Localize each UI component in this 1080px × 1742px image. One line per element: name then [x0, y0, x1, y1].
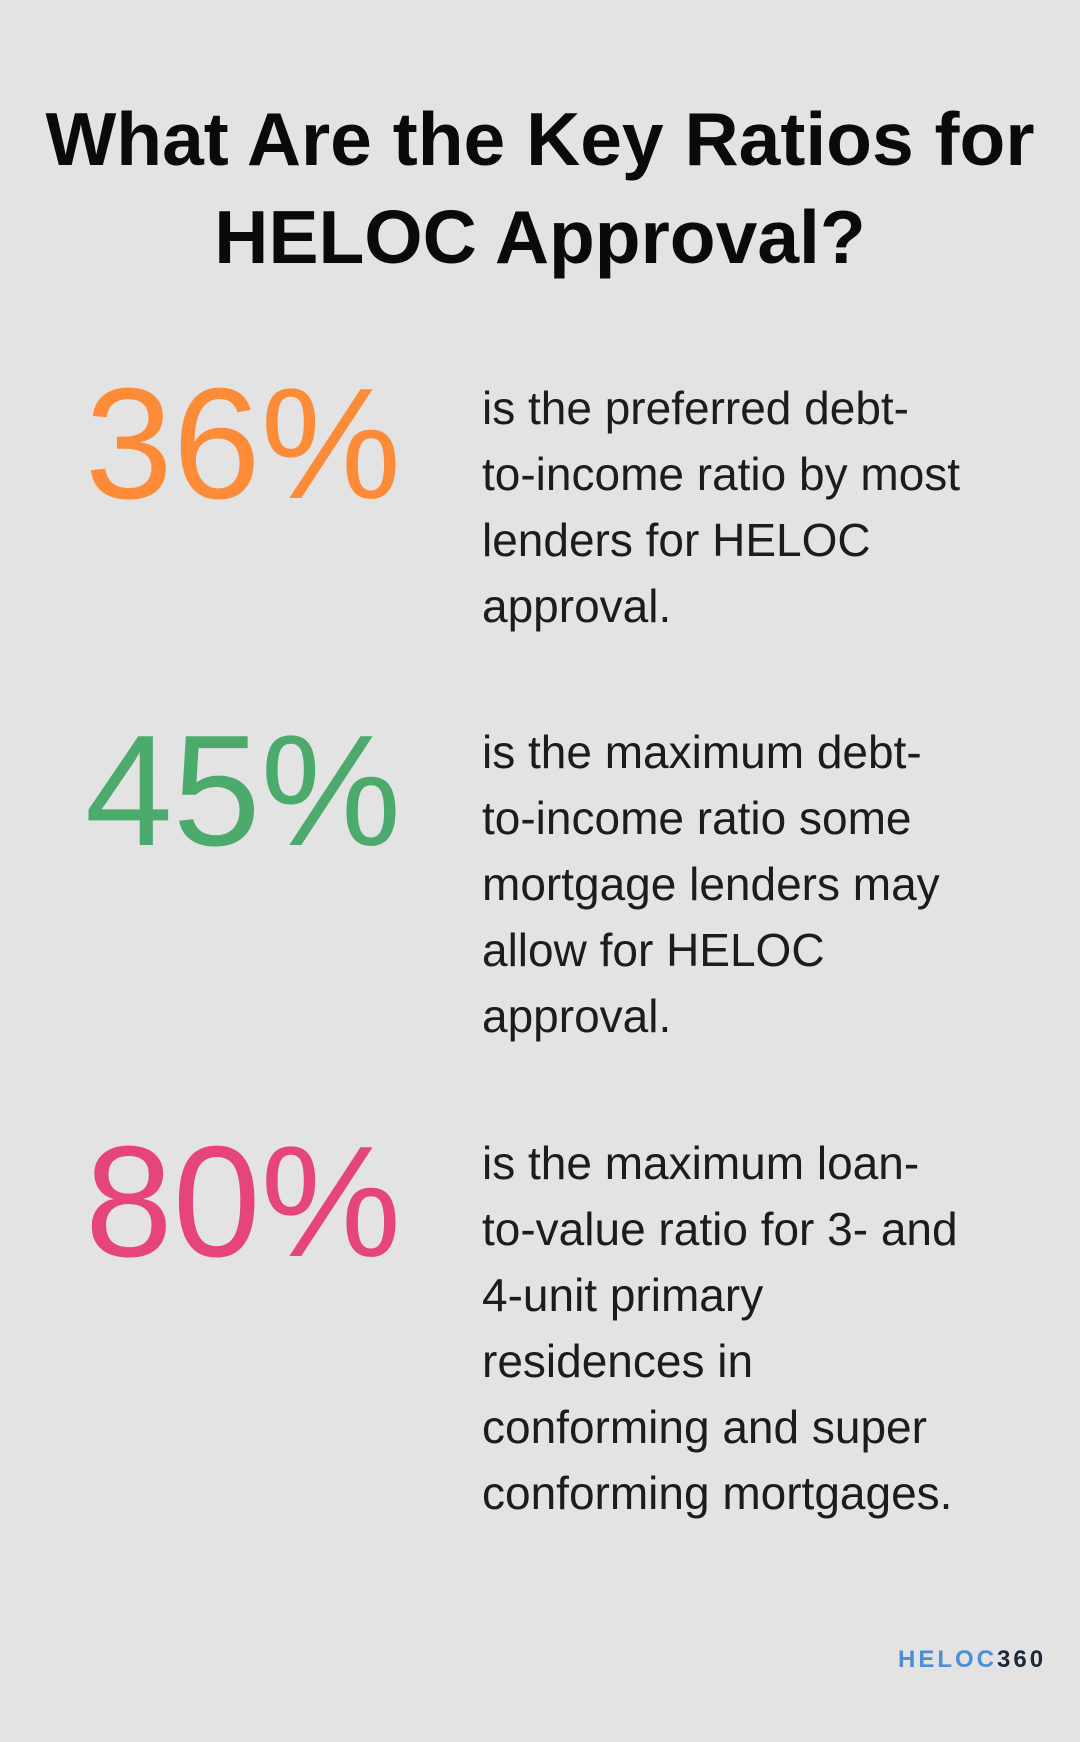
title: What Are the Key Ratios for: [45, 97, 1035, 181]
text: 80% description: [482, 1137, 958, 1519]
text: 80% description: is the maximum loan-: [482, 1137, 919, 1189]
title: [45, 97, 1035, 279]
text: 45% description: [482, 726, 940, 1042]
text: 45% description: is the maximum debt-: [482, 726, 922, 778]
stat: 36%: 36%: [85, 356, 401, 532]
stat: 80%: 80%: [85, 1114, 401, 1290]
text: 80% description: residences in: [482, 1335, 753, 1387]
text: 80% description: conforming mortgages.: [482, 1467, 952, 1519]
text: 80% description: 4-unit primary: [482, 1269, 763, 1321]
text: 45% description: approval.: [482, 990, 671, 1042]
text: 36% description: approval.: [482, 580, 671, 632]
text: 36% description: lenders for HELOC: [482, 514, 871, 566]
title: HELOC Approval?: [214, 195, 866, 279]
text: 45% description: mortgage lenders may: [482, 858, 940, 910]
logo: HELOC360: [898, 1646, 1046, 1673]
text: 45% description: allow for HELOC: [482, 924, 825, 976]
text: 80% description: conforming and super: [482, 1401, 927, 1453]
text: 80% description: to-value ratio for 3- and: [482, 1203, 958, 1255]
stat: 45%: 45%: [85, 703, 401, 879]
text: 45% description: to-income ratio some: [482, 792, 912, 844]
text: 36% description: is the preferred debt-: [482, 382, 909, 434]
text: 36% description: [482, 382, 960, 632]
text: 36% description: to-income ratio by most: [482, 448, 960, 500]
